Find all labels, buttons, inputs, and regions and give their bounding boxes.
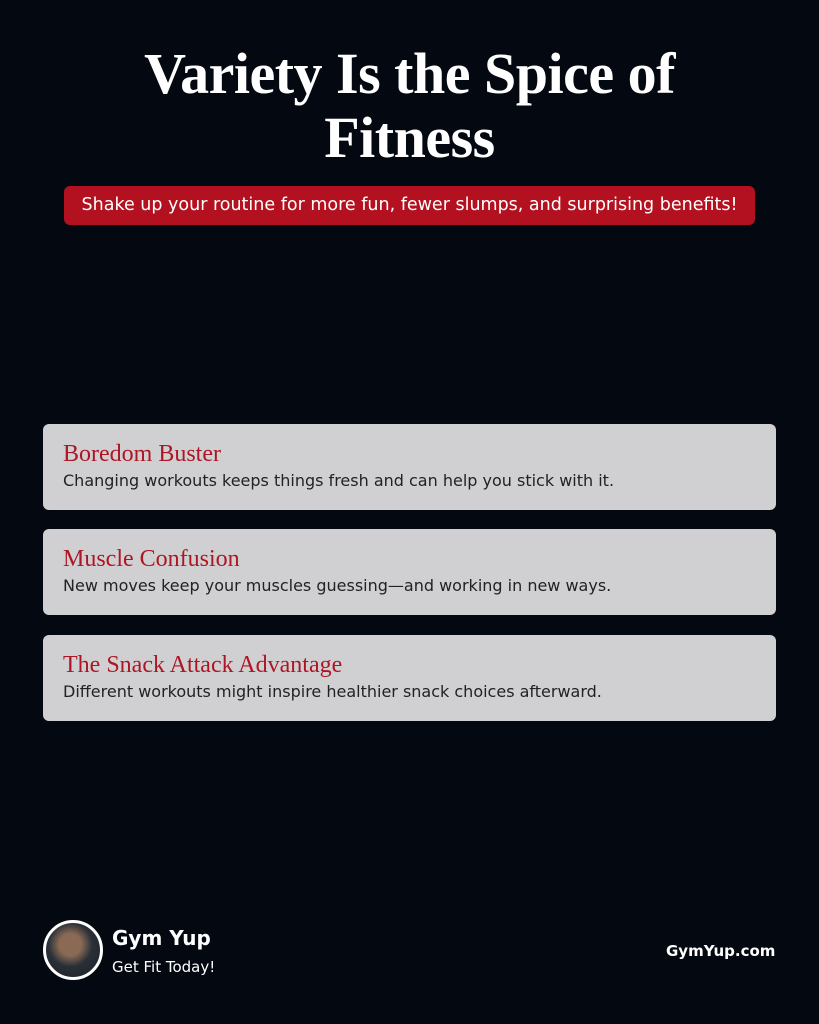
card: boredom buster: Changing workouts keeps things fresh and can help you stick with it. — [63, 471, 614, 490]
card: muscle confusion: New moves keep your muscles guessing—and working in new ways. — [63, 576, 611, 595]
icon: avatar — [43, 920, 103, 980]
card: snack attack: The Snack Attack Advantage — [63, 652, 342, 678]
title — [144, 41, 676, 170]
card: snack attack — [43, 635, 776, 721]
card: boredom buster — [43, 424, 776, 510]
card: boredom buster: Boredom Buster — [63, 441, 221, 467]
subtitle banner: Shake up your routine for more fun, fewer slumps, and surprising benefits! — [82, 195, 737, 215]
subtitle banner — [64, 186, 755, 225]
title: Fitness — [324, 105, 495, 170]
brand name: Gym Yup — [112, 926, 211, 950]
tagline: Get Fit Today! — [112, 958, 215, 976]
card: muscle confusion — [43, 529, 776, 615]
website: GymYup.com — [666, 942, 775, 960]
card: muscle confusion: Muscle Confusion — [63, 546, 240, 572]
title: Variety Is the Spice of — [144, 41, 675, 106]
card: snack attack: Different workouts might inspire healthier snack choices afterward. — [63, 682, 602, 701]
